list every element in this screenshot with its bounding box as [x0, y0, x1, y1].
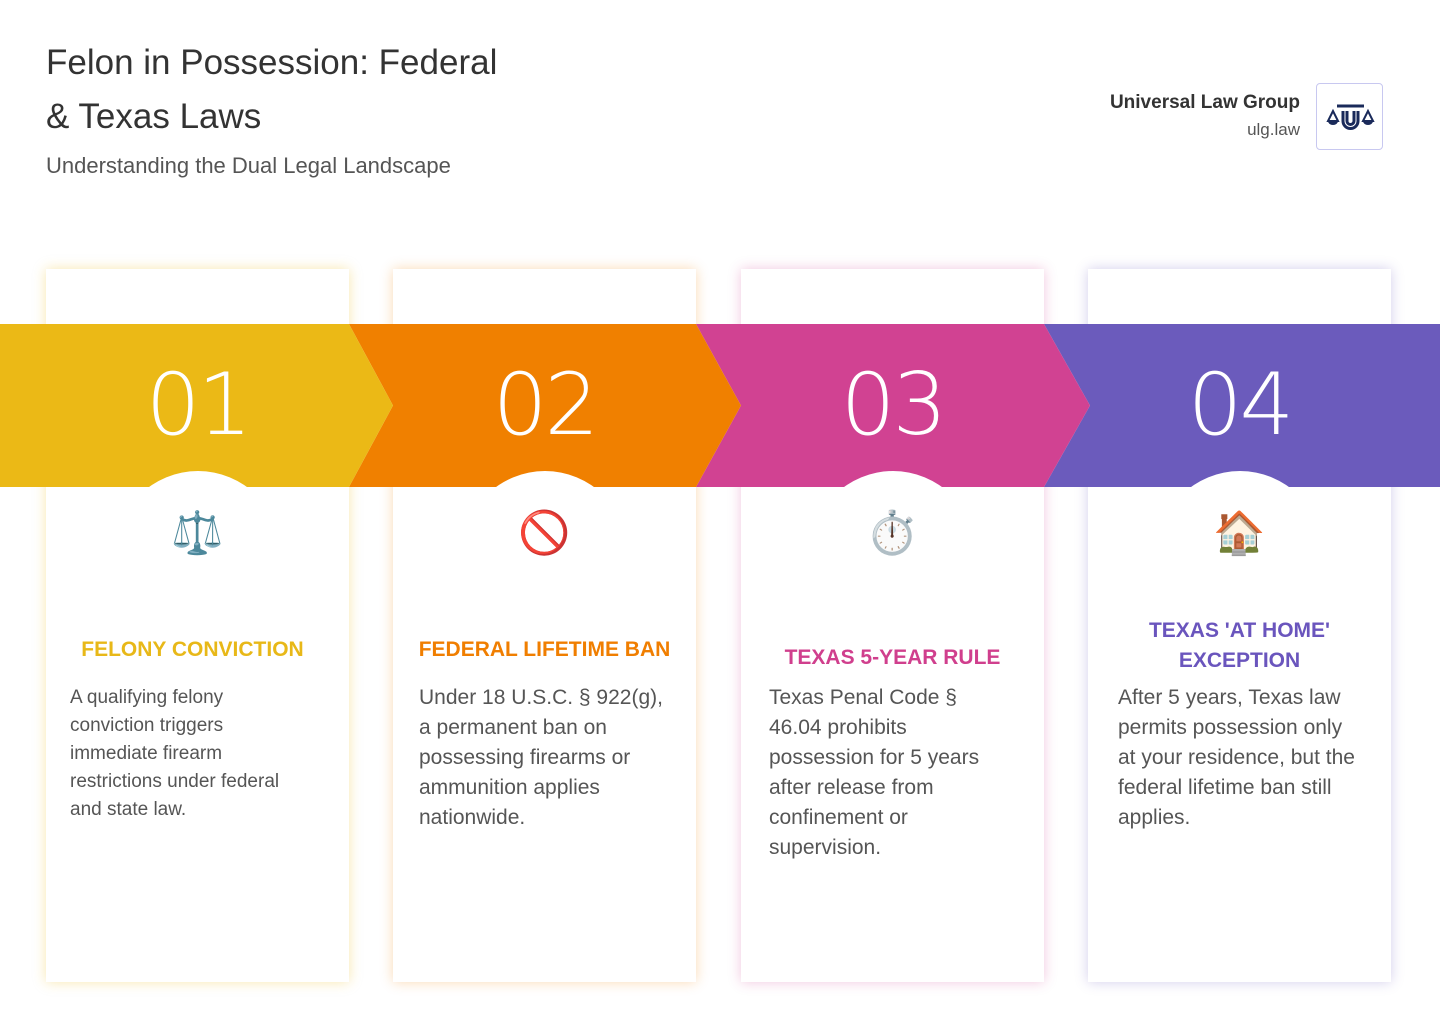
title 1: FELONY CONVICTION [81, 638, 304, 661]
chevron band [0, 324, 1440, 487]
brand url: ulg.law [1247, 120, 1300, 139]
title 3: TEXAS 5-YEAR RULE [785, 646, 1000, 669]
icon: stopwatch: ⏱️ [866, 509, 919, 556]
subtitle: Understanding the Dual Legal Landscape [46, 153, 451, 178]
number 04: 04 [1188, 355, 1291, 455]
logo [1316, 83, 1383, 150]
title: Felon in Possession: Federal & Texas Laws [46, 43, 497, 136]
title 2: FEDERAL LIFETIME BAN [419, 638, 670, 661]
icon: prohibited: 🚫 [518, 509, 571, 556]
body 1: A qualifying felony conviction triggers immediate firearm restrictions under federal and state law. [70, 687, 279, 820]
title 4: TEXAS 'AT HOME' [1149, 619, 1330, 642]
brand [1110, 83, 1383, 150]
card 3 [741, 269, 1044, 982]
number 01: 01 [146, 355, 249, 455]
number 03: 03 [841, 355, 944, 455]
card 1 [46, 269, 349, 982]
card 2 [393, 269, 696, 982]
icon: scales: ⚖️ [171, 509, 224, 556]
title 4: EXCEPTION [1179, 649, 1300, 672]
brand name: Universal Law Group [1110, 92, 1300, 113]
title 4 [1149, 619, 1330, 672]
body 2: Under 18 U.S.C. § 922(g), a permanent ban on possessing firearms or ammunition applies nationwide. [419, 686, 663, 829]
body 4: After 5 years, Texas law permits possession only at your residence, but the federal lifetime ban still applies. [1118, 686, 1355, 829]
card 4 [1088, 269, 1391, 982]
number 02: 02 [493, 355, 596, 455]
body 3: Texas Penal Code § 46.04 prohibits possession for 5 years after release from confinement or supervision. [769, 686, 979, 859]
icon: house: 🏠 [1213, 509, 1266, 556]
